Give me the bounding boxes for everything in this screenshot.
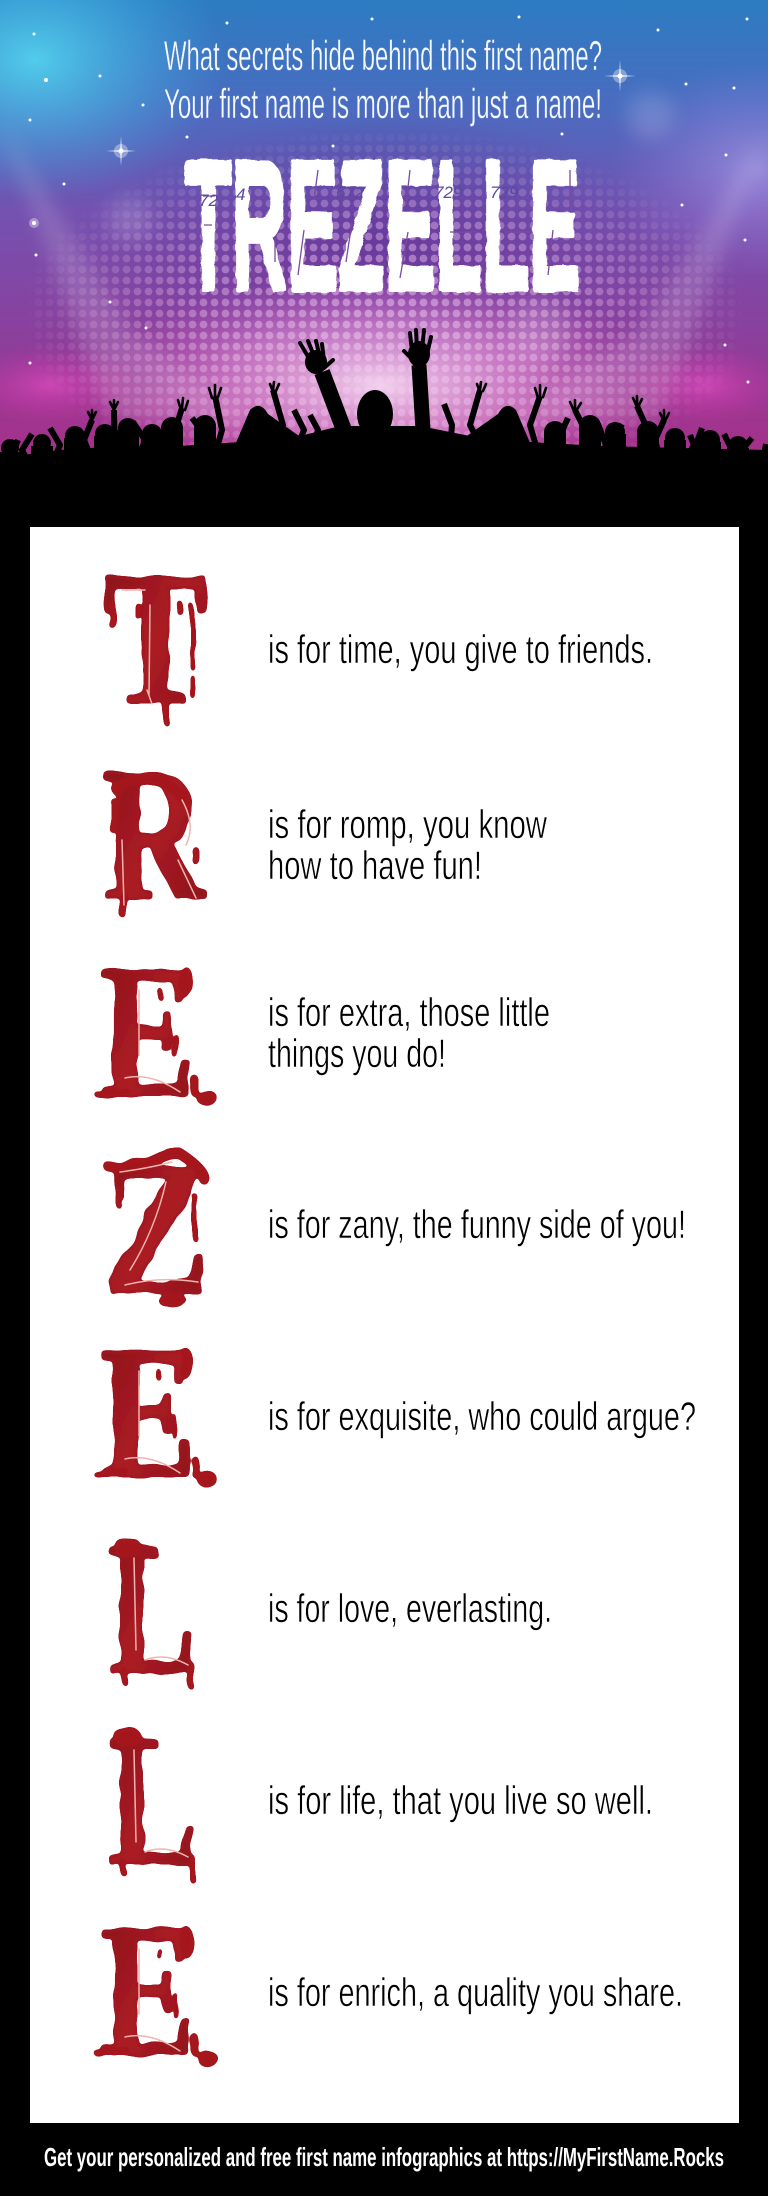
- text: E line: things you do!: [268, 1032, 446, 1076]
- icon: blood letter E: E: [100, 1308, 196, 1518]
- raised arms: [8, 390, 766, 465]
- side figures: [225, 406, 312, 470]
- crowd heads and fists: [1, 415, 748, 457]
- title: first name: 729: [434, 183, 463, 202]
- crowd bodies: [10, 428, 738, 470]
- row 8: E: [97, 1886, 683, 2096]
- icon: blood letter Z: Z: [103, 1124, 210, 1334]
- heading: header tagline: [164, 32, 602, 127]
- text: R line: how to have fun!: [268, 844, 482, 888]
- title: first name: 729: [490, 183, 519, 202]
- icon: blood letter L: L: [108, 1504, 198, 1714]
- title: first name: 672: [336, 183, 365, 202]
- panel: acrostic card: [30, 527, 739, 2123]
- row 5: E: [97, 1308, 696, 1518]
- text: R line: [268, 803, 547, 888]
- icon: blood letter T: T: [104, 534, 208, 744]
- text: R line: is for romp, you know: [268, 803, 547, 847]
- title: first name: 4: [236, 185, 245, 204]
- text: E line: is for extra, those little: [268, 991, 550, 1035]
- row 7: L: [108, 1696, 653, 1906]
- decorative stars: [28, 16, 750, 384]
- panel: concert stage header background: [0, 0, 768, 500]
- row 4: Z: [103, 1124, 686, 1334]
- title: first name: 72: [199, 191, 218, 210]
- row 1: T: [104, 534, 653, 744]
- icon: blood letter E: E: [100, 1886, 196, 2096]
- fingers and fists: [88, 382, 669, 421]
- text: E line: [268, 991, 550, 1076]
- title: first name: [185, 122, 580, 328]
- icon: blood letter E: E: [100, 927, 196, 1137]
- row 2: R: [103, 730, 547, 940]
- row 3: E: [97, 927, 550, 1137]
- central figure: [300, 330, 445, 465]
- icon: blood letter R: R: [103, 730, 206, 940]
- icon: blood letter L: L: [108, 1696, 198, 1906]
- crowd silhouette: [0, 330, 768, 530]
- text: L line: is for love, everlasting.: [268, 1587, 552, 1631]
- row 6: L: [108, 1504, 552, 1714]
